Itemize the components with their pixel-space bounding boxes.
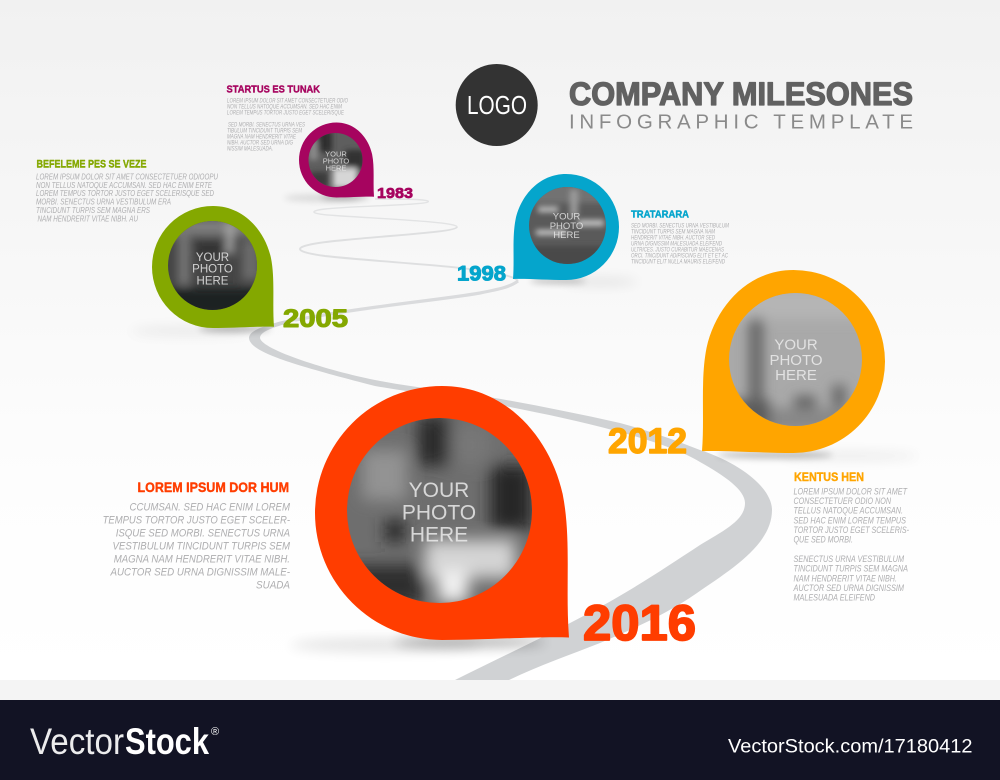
milestone 1983: HERE <box>326 164 346 173</box>
text block: kentus hen: MALESUADA ELEIFEND <box>794 593 875 603</box>
milestone 2016: YOUR <box>409 479 469 502</box>
milestone 1983 <box>284 122 413 202</box>
milestone 2012: PHOTO <box>769 352 823 369</box>
text block: startus es tunak <box>226 84 348 152</box>
footer brand <box>30 721 219 762</box>
title: COMPANY MILESONES <box>569 76 913 112</box>
text block: befeleme pes se veze: LOREM TEMPUS TORTOR JUSTO EGET SCELERISQUE SED <box>36 189 214 198</box>
milestone 1983: 1983 <box>377 185 413 202</box>
text block: tratarara <box>631 209 729 265</box>
timeline road <box>249 199 772 680</box>
text block: kentus hen: TELLUS NATOQUE ACCUMSAN. <box>794 506 903 516</box>
milestone 1998: YOUR <box>553 211 580 222</box>
text block: befeleme pes se veze: BEFELEME PES SE VEZE <box>36 158 146 170</box>
text block: lorem ipsum dor hum: CCUMSAN. SED HAC ENIM LOREM <box>130 502 290 514</box>
text block: tratarara: SED MORBI. SENECTUS URNA VESTIBULUM <box>631 223 729 229</box>
text block: befeleme pes se veze: LOREM IPSUM DOLOR SIT AMET CONSECTETUER ODIOOPU <box>36 172 218 182</box>
text block: startus es tunak: NON TELLUS NATOQUE ACCUMSAN. SED HAC ENIM <box>227 104 342 110</box>
milestone 1998: PHOTO <box>550 221 583 232</box>
text block: kentus hen: AUCTOR SED URNA DIGNISSIM <box>793 583 904 593</box>
text block: befeleme pes se veze: NAM HENDRERIT VITAE NIBH. AU <box>38 214 138 224</box>
text block: lorem ipsum dor hum: TEMPUS TORTOR JUSTO EGET SCELER- <box>103 514 290 526</box>
text block: tratarara: ORCI. TINCIDUNT ADIPISCING ELIT ET ET AC <box>631 253 728 259</box>
milestone 2005: PHOTO <box>192 264 233 276</box>
footer brand: Stock <box>125 721 209 762</box>
text block: lorem ipsum dor hum: MAGNA NAM HENDRERIT VITAE NIBH. <box>114 553 290 565</box>
text block: lorem ipsum dor hum: LOREM IPSUM DOR HUM <box>138 479 289 495</box>
text block: tratarara: ULTRICES. JUSTO CURABITUR MAECENAS <box>631 247 724 253</box>
text block: befeleme pes se veze <box>36 158 218 224</box>
milestone 2012: HERE <box>775 367 817 384</box>
text block: startus es tunak: LOREM TEMPUS TORTOR JUSTO EGET SCELERISQUE <box>227 110 345 116</box>
text block: befeleme pes se veze: TINCIDUNT TURPIS SEM MAGNA ERS <box>36 206 151 215</box>
text block: startus es tunak: MAGNA NAM HENDRERIT VITAE <box>227 134 297 140</box>
milestone 2005: 2005 <box>283 305 348 333</box>
text block: startus es tunak: SED MORBI. SENECTUS URNA VES <box>228 122 305 128</box>
text block: lorem ipsum dor hum: SUADA <box>256 579 290 591</box>
milestone 2016: PHOTO <box>402 501 476 524</box>
text block: kentus hen: CONSECTETUER ODIO NON <box>794 496 891 506</box>
text block: befeleme pes se veze: MORBI. SENECTUS URNA VESTIBULUM ERA <box>36 198 171 206</box>
text block: tratarara: TINCIDUNT TURPIS SEM MAGNA NAM <box>631 229 715 235</box>
text block: tratarara: URNA DIGNISSIM MALESUADA ELEIFEND <box>631 241 723 247</box>
logo: LOGO <box>467 90 527 120</box>
logo <box>456 64 538 146</box>
text block: startus es tunak: LOREM IPSUM DOLOR SIT AMET CONSECTETUER ODIO <box>227 98 348 104</box>
text block: lorem ipsum dor hum: AUCTOR SED URNA DIGNISSIM MALE- <box>110 566 290 578</box>
milestone 2016 <box>290 386 696 652</box>
footer brand: ® <box>211 726 219 738</box>
text block: tratarara: TRATARARA <box>631 209 689 220</box>
text block: befeleme pes se veze: NON TELLUS NATOQUE ACCUMSAN. SED HAC ENIM ERTE <box>36 181 213 190</box>
milestone 1998: HERE <box>553 230 580 241</box>
text block: lorem ipsum dor hum <box>103 479 290 591</box>
milestone 1998 <box>457 174 638 286</box>
subtitle: INFOGRAPHIC TEMPLATE <box>569 110 913 134</box>
footer brand: Vector <box>30 721 124 762</box>
milestone 2005 <box>130 206 348 335</box>
text block: kentus hen: NAM HENDRERIT VITAE NIBH. <box>794 573 897 583</box>
text block: kentus hen: TORTOR JUSTO EGET SCELERIS- <box>794 525 909 535</box>
milestone 2005: HERE <box>197 275 229 287</box>
milestone 2016: 2016 <box>583 595 696 651</box>
milestone 2012: 2012 <box>608 422 687 461</box>
bottom light strip <box>0 680 1000 700</box>
milestone 1983: YOUR <box>325 150 347 159</box>
text block: kentus hen <box>793 470 909 603</box>
text block: kentus hen: SED HAC ENIM LOREM TEMPUS <box>794 515 906 525</box>
milestone 2012 <box>608 270 886 463</box>
milestone 1998: 1998 <box>457 262 506 286</box>
text block: lorem ipsum dor hum: ISQUE SED MORBI. SENECTUS URNA <box>116 527 290 539</box>
text block: kentus hen: TINCIDUNT TURPIS SEM MAGNA <box>794 564 908 574</box>
text block: kentus hen: QUE SED MORBI. <box>794 535 853 545</box>
text block: startus es tunak: TIBULUM TINCIDUNT TURPIS SEM <box>227 128 302 134</box>
footer bar <box>0 700 1000 780</box>
milestone 2012: YOUR <box>774 336 818 353</box>
milestone 1983: PHOTO <box>323 157 349 166</box>
milestone 2016: HERE <box>410 524 468 547</box>
text block: startus es tunak: NISSIM MALESUADA. <box>227 146 273 152</box>
milestone 2005: YOUR <box>196 252 229 264</box>
footer image id: VectorStock.com/17180412 <box>728 737 972 758</box>
text block: lorem ipsum dor hum: VESTIBULUM TINCIDUNT TURPIS SEM <box>112 540 290 552</box>
text block: kentus hen: SENECTUS URNA VESTIBULUM <box>794 554 904 564</box>
text block: kentus hen: LOREM IPSUM DOLOR SIT AMET <box>794 486 908 496</box>
text block: tratarara: HENDRERIT VITAE NIBH. AUCTOR SED <box>631 235 715 241</box>
text block: startus es tunak: STARTUS ES TUNAK <box>226 84 320 96</box>
text block: tratarara: TINCIDUNT ELIT NULLA MAURIS ELEIFEND <box>631 259 726 265</box>
text block: startus es tunak: NIBH. AUCTOR SED URNA DIG <box>227 140 293 146</box>
text block: kentus hen: KENTUS HEN <box>794 470 864 484</box>
